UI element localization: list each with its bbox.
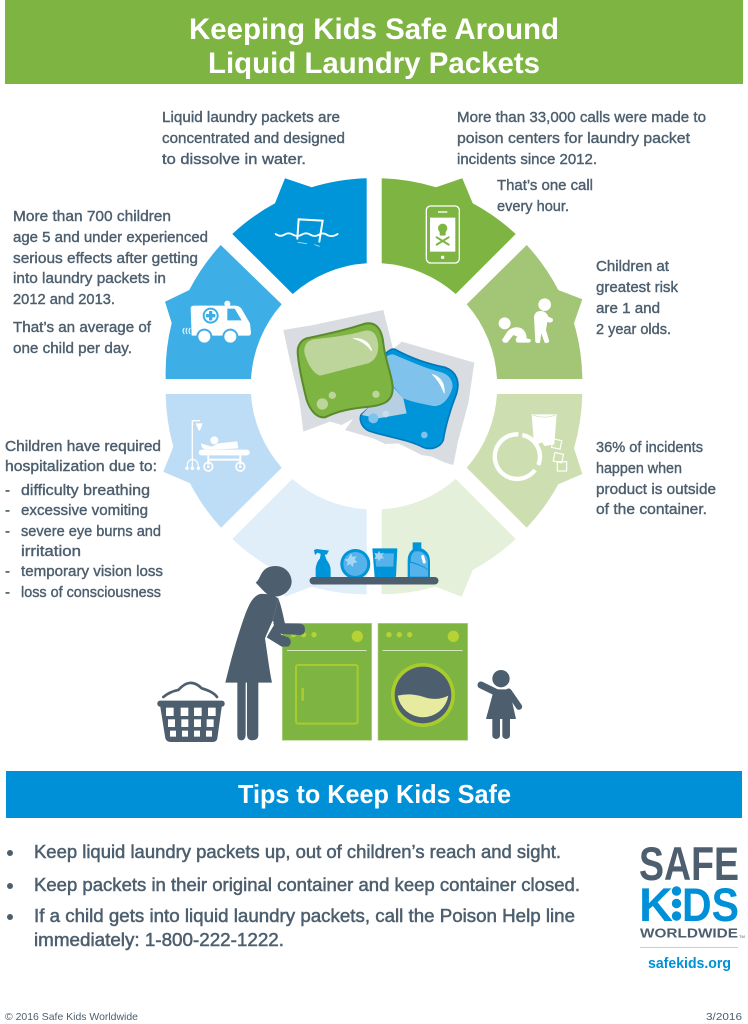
blue packet [345,342,474,465]
text: 700 children: 2012 and 2013. [13,291,115,308]
icon: ambulance [183,301,251,345]
dryer [282,623,372,740]
icon: packet dissolving in water [276,219,338,246]
shelf [310,577,438,584]
text: greatest risk: greatest risk [596,279,678,296]
text: 36 percent of incidents: product is outside [596,481,716,498]
text: hospitalization causes: hospitalization due to: [5,458,157,475]
text: hospitalization causes: - [5,563,10,580]
text: 700 children [13,208,208,357]
tips list [7,842,580,950]
text: hospitalization causes: irritation [21,543,81,560]
text: 36 percent of incidents: happen when [596,460,682,477]
title banner: Liquid Laundry Packets [208,47,540,80]
segment: poison calls [382,178,516,294]
text: 700 children: That’s an average of [13,319,152,336]
text: poison center calls: every hour. [497,198,569,215]
text: packets are concentrated: concentrated and designed [162,130,345,147]
segment: bottom right [382,479,516,597]
text: packets are concentrated: Liquid laundry packets are [162,109,340,126]
detergent jug [408,542,430,578]
segment: dissolve in water [232,178,367,294]
logo: Safe Kids Worldwide: K [639,878,673,931]
text: hospitalization causes: severe eye burns and [21,523,161,540]
footer: © 2016 Safe Kids Worldwide [5,1011,138,1023]
woman figure [225,566,305,740]
text: packets are concentrated: to dissolve in water. [162,151,306,168]
text: greatest risk [596,258,678,338]
text: hospitalization causes: - [5,523,10,540]
logo: Safe Kids Worldwide: DS [682,878,739,931]
shelf with cleaning products [310,542,438,584]
logo: Safe Kids Worldwide: WORLDWIDE [640,926,738,940]
text: hospitalization causes: excessive vomiting [21,502,148,519]
text: 700 children: More than 700 children [13,208,171,225]
icon: crawling baby and toddler [499,298,553,343]
laundry basket [157,683,225,742]
text: 36 percent of incidents: of the container. [596,501,707,518]
tips list: If a child gets into liquid laundry packets, call the Poison Help line [34,906,575,926]
text: poison center calls: poison centers for laundry packet [457,130,691,147]
segment: ambulance [165,245,282,379]
text: 36 percent of incidents [596,439,716,518]
logo: Safe Kids Worldwide: TM [739,934,745,939]
text: 700 children: one child per day. [13,340,132,357]
text: 36 percent of incidents: 36% of incidents [596,439,703,456]
text: hospitalization causes: loss of consciousness [21,584,161,601]
footer [5,1011,742,1023]
segment: outside of container [467,394,582,528]
title banner: Keeping Kids Safe Around [189,13,559,46]
tips list: Keep packets in their original container and keep container closed. [34,875,580,895]
text: poison center calls: incidents since 2012. [457,151,597,168]
footer: 3/2016 [706,1011,742,1023]
text: poison center calls [457,109,706,215]
text: hospitalization causes: - [5,482,10,499]
tips banner: Tips to Keep Kids Safe [238,779,511,809]
washing machine [378,623,468,740]
logo: Safe Kids Worldwide: safekids.org [648,955,731,972]
text: poison center calls: That’s one call [497,177,593,194]
text: hospitalization causes: - [5,502,10,519]
text: poison center calls: More than 33,000 calls were made to [457,109,706,126]
logo: Safe Kids Worldwide [639,837,745,972]
text: 700 children: into laundry packets in [13,270,166,287]
text: hospitalization causes: temporary vision loss [21,563,163,580]
text: hospitalization causes: difficulty breathing [21,482,150,499]
text: packets are concentrated [162,109,345,168]
segment: hospital [163,394,282,528]
segment: bottom left [232,479,367,597]
spray bottle [314,549,331,578]
round jar [340,549,370,579]
green packet [298,323,393,417]
text: greatest risk: 2 year olds. [596,321,671,338]
text: hospitalization causes: Children have required [5,438,161,455]
tips list: immediately: 1-800-222-1222. [34,930,284,950]
tips list: Keep liquid laundry packets up, out of children’s reach and sight. [34,842,561,862]
title banner [5,0,743,84]
text: hospitalization causes [5,438,163,601]
text: greatest risk: Children at [596,258,670,275]
text: greatest risk: are 1 and [596,300,660,317]
text: 700 children: age 5 and under experienced [13,229,208,246]
segment: children at risk [467,245,582,379]
text: hospitalization causes: - [5,584,10,601]
laundry packets illustration [283,310,474,465]
detergent box [372,548,397,578]
icon: donut chart with container [495,414,567,479]
green packet wrapper [283,310,394,432]
child figure [481,670,519,739]
icon: hospital bed with IV pole [185,421,250,471]
tips banner [6,771,742,818]
text: 700 children: serious effects after getting [13,250,198,267]
icon: phone with skull [426,206,459,263]
